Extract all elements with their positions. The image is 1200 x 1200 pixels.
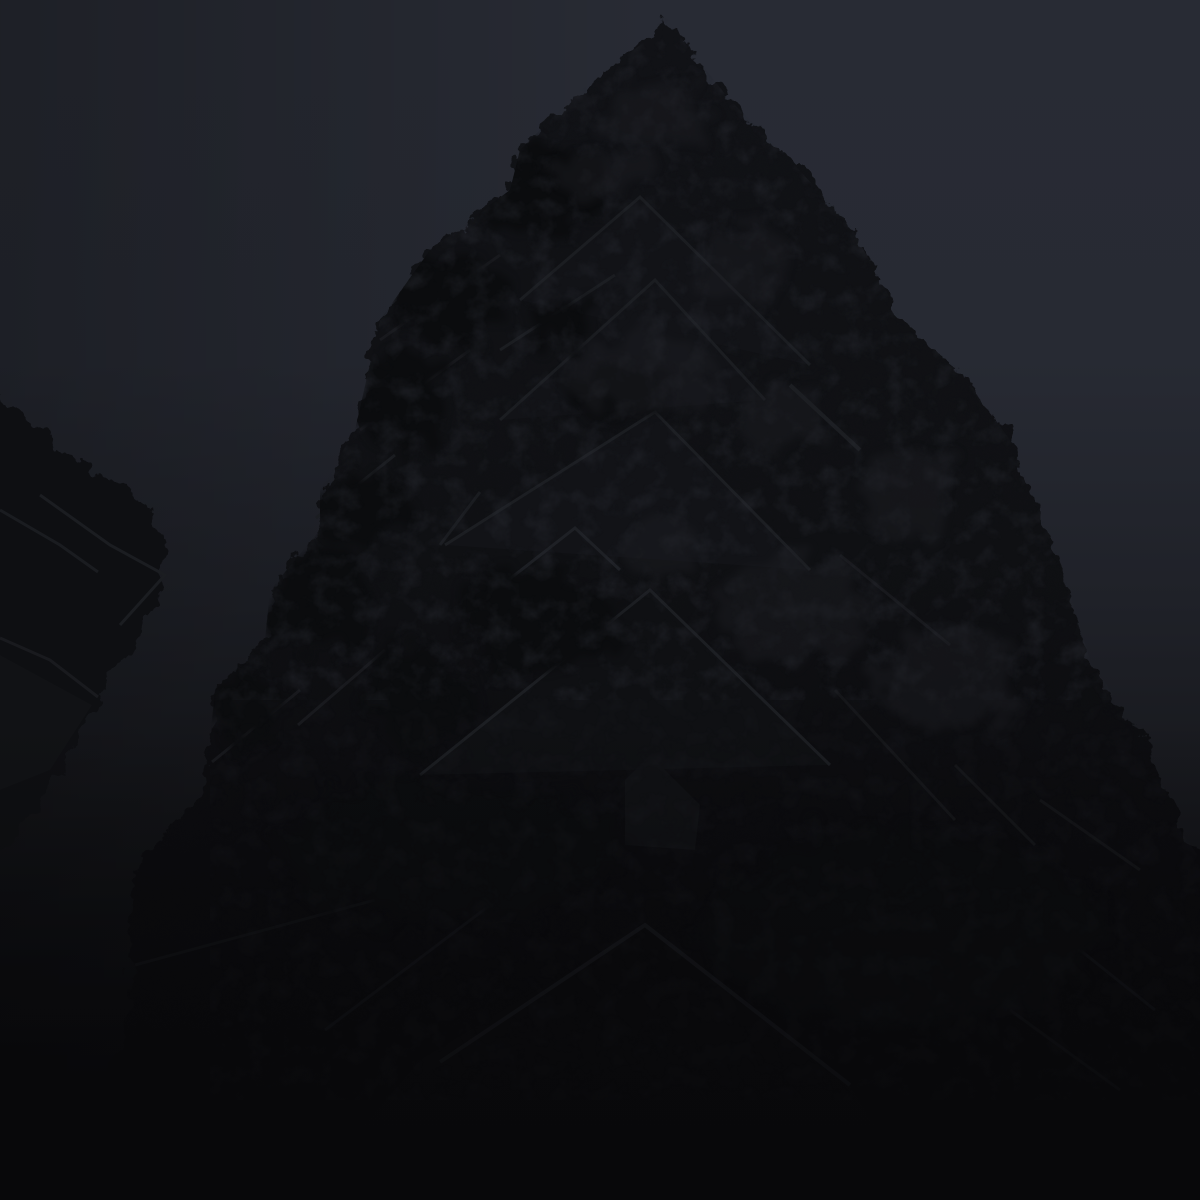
left neighbouring tower xyxy=(0,385,168,870)
balcony: base tier xyxy=(135,890,1155,1200)
dark foliage clumps xyxy=(212,135,656,746)
balcony slabs xyxy=(135,197,1155,1200)
balcony: upper tier xyxy=(360,197,810,430)
full scene illustration xyxy=(0,0,1200,849)
lit foliage texture xyxy=(264,68,1086,700)
lit foliage clumps xyxy=(572,157,656,408)
balcony: lower tier xyxy=(212,590,1140,870)
balcony: middle tier xyxy=(316,385,950,645)
